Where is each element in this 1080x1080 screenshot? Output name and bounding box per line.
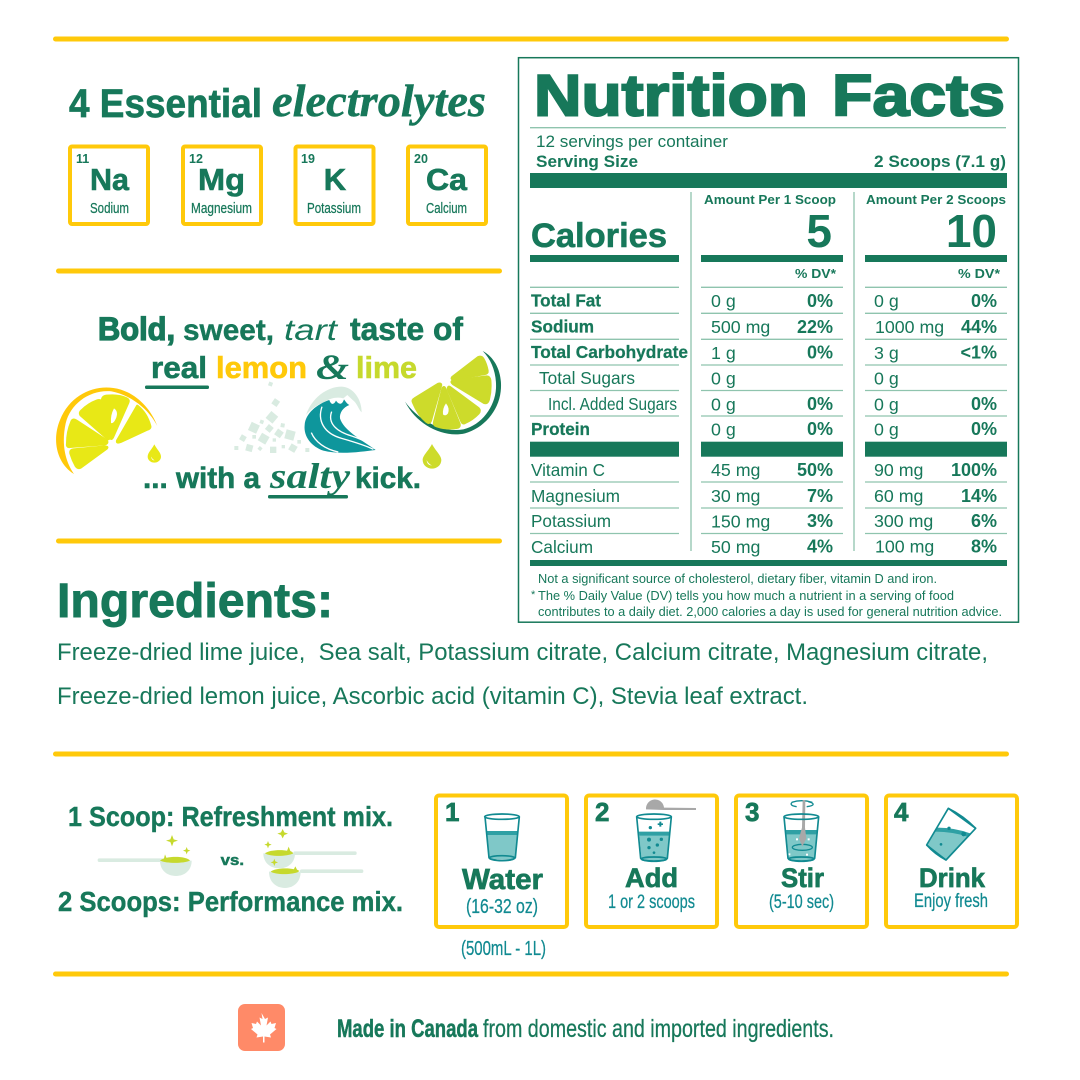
row: protein: 0 g xyxy=(711,420,736,440)
element card: calcium xyxy=(408,146,486,224)
row: vitamin c: 50% xyxy=(797,460,833,480)
element card: sodium: 11 xyxy=(76,152,89,166)
step 2: add: 1 or 2 scoops xyxy=(608,892,695,913)
taste headline line 3: kick. xyxy=(355,462,421,495)
row: potassium: 3% xyxy=(807,511,833,531)
row: added sugars: 0% xyxy=(807,394,833,414)
element card: potassium: K xyxy=(324,162,347,197)
row: total carbohydrate: <1% xyxy=(960,342,997,362)
row: magnesium: 60 mg xyxy=(874,486,923,506)
ingredients list: Freeze-dried lime juice, Sea salt, Potassium citrate, Calcium citrate, Magnesium citrate, xyxy=(57,639,988,666)
icon: scoops xyxy=(98,829,363,888)
row: calcium: 4% xyxy=(807,536,833,556)
row: sodium: 500 mg xyxy=(711,317,770,337)
ingredients list: Freeze-dried lemon juice, Ascorbic acid (vitamin C), Stevia leaf extract. xyxy=(57,683,808,710)
panel: ingredients xyxy=(57,575,988,710)
icon: lemon drop xyxy=(148,444,161,463)
row: magnesium xyxy=(531,486,997,506)
row: added sugars: 0 g xyxy=(874,394,899,414)
calories row: % DV* xyxy=(958,267,1000,281)
row: total carbohydrate: 0% xyxy=(807,342,833,362)
row: vitamin c: Vitamin C xyxy=(531,460,605,480)
icon: adding scoop to glass xyxy=(637,799,696,861)
heading: 4 essential electrolytes xyxy=(69,75,486,126)
row: magnesium: Magnesium xyxy=(531,486,620,506)
row: potassium: 150 mg xyxy=(711,512,770,532)
footnotes: * xyxy=(531,589,536,601)
row: total sugars xyxy=(539,368,899,388)
nutrition title: Nutrition xyxy=(534,64,808,128)
footer text: from domestic and imported ingredients. xyxy=(483,1015,834,1043)
calories row: Amount Per 1 Scoop xyxy=(704,193,836,207)
row: sodium: 1000 mg xyxy=(875,317,944,337)
heading: 4 essential electrolytes: electrolytes xyxy=(272,75,486,126)
element card: calcium: 20 xyxy=(414,152,428,166)
ingredients list xyxy=(57,639,988,710)
element card: magnesium: 12 xyxy=(189,152,203,166)
row: total carbohydrate: 1 g xyxy=(711,343,736,363)
step 4: drink xyxy=(886,796,1017,927)
taste headline line 3: ... with a xyxy=(143,462,260,495)
row: sodium: 22% xyxy=(797,317,833,337)
taste headline line 1: sweet, xyxy=(183,314,274,347)
row: added sugars: 0% xyxy=(971,394,997,414)
step 3: stir: Stir xyxy=(781,863,824,893)
element card: magnesium: Mg xyxy=(198,162,245,197)
row: protein: 0 g xyxy=(874,420,899,440)
row: vitamin c: 45 mg xyxy=(711,460,760,480)
footer text: Made in Canada xyxy=(337,1015,479,1043)
element card: calcium: Ca xyxy=(426,162,468,197)
taste headline line 2: lemon xyxy=(216,350,307,385)
row: potassium: 300 mg xyxy=(874,511,933,531)
icon: maple leaf xyxy=(238,1004,285,1051)
row: magnesium: 14% xyxy=(961,486,997,506)
taste headline line 1: tart xyxy=(284,314,339,347)
step 1: water: Water xyxy=(462,864,543,896)
panel: electrolytes xyxy=(69,75,486,224)
step 1: water: (16-32 oz) xyxy=(466,896,538,918)
serving info xyxy=(536,133,1006,171)
step 3: stir: 3 xyxy=(745,797,759,827)
element card: potassium xyxy=(296,146,374,224)
icon: stirring glass xyxy=(784,800,819,861)
row: magnesium: 7% xyxy=(807,486,833,506)
icon: tilted glass xyxy=(927,808,976,860)
row: total carbohydrate xyxy=(531,342,997,363)
taste headline line 1 xyxy=(98,311,463,347)
panel: scoop comparison xyxy=(58,801,403,917)
row: calcium: Calcium xyxy=(531,537,593,557)
step 4: drink: 4 xyxy=(894,797,909,827)
row: total sugars: 0 g xyxy=(711,368,736,388)
taste headline line 2: real xyxy=(151,350,207,385)
row: calcium: 8% xyxy=(971,536,997,556)
element card: potassium: Potassium xyxy=(307,200,361,217)
row: protein: Protein xyxy=(531,419,590,439)
row: magnesium: 30 mg xyxy=(711,486,760,506)
nutrition title: Facts xyxy=(832,64,1005,128)
taste headline line 3: salty xyxy=(269,456,351,496)
step 2: add xyxy=(586,796,717,927)
icon: lime drop xyxy=(423,444,441,469)
footnotes: The % Daily Value (DV) tells you how much a nutrient in a serving of food xyxy=(538,589,954,603)
two scoops label: 2 Scoops: Performance mix. xyxy=(58,886,403,917)
element card: magnesium xyxy=(183,146,261,224)
step 1: water: 1 xyxy=(445,797,459,827)
row: total sugars: 0 g xyxy=(874,368,899,388)
icon: glass of water xyxy=(485,814,519,861)
calories row xyxy=(530,193,1007,281)
taste headline line 1: taste of xyxy=(350,311,463,347)
taste headline line 2: & xyxy=(316,347,349,387)
calories row: 5 xyxy=(806,205,832,257)
footnotes xyxy=(531,572,1002,619)
two scoops icon xyxy=(263,829,363,888)
row: sodium xyxy=(531,316,997,337)
element card: calcium: Calcium xyxy=(426,200,467,217)
step 2: add: Add xyxy=(625,863,678,893)
row: total carbohydrate: 3 g xyxy=(874,343,899,363)
taste headline line 1: Bold, xyxy=(98,311,175,347)
footnotes: contributes to a daily diet. 2,000 calories a day is used for general nutrition advice. xyxy=(538,605,1002,619)
panel: nutrition facts xyxy=(518,58,1018,622)
step 1: water: (500mL - 1L) xyxy=(461,938,546,960)
taste headline line 3 xyxy=(143,456,421,498)
serving info: Serving Size xyxy=(536,153,638,171)
row: calcium: 100 mg xyxy=(875,536,934,556)
one scoop icon xyxy=(98,835,192,876)
vs label: vs. xyxy=(221,853,244,869)
nutrition title xyxy=(534,64,1005,128)
element card: magnesium: Magnesium xyxy=(191,200,252,217)
element card: sodium: Na xyxy=(90,162,130,197)
row: calcium: 50 mg xyxy=(711,537,760,557)
calories row: % DV* xyxy=(795,267,836,281)
step 4: drink: Drink xyxy=(919,863,986,893)
panel: taste xyxy=(56,311,501,498)
calories row: Calories xyxy=(531,217,667,255)
row: calcium xyxy=(531,536,997,557)
element card: potassium: 19 xyxy=(301,152,315,166)
row: potassium: Potassium xyxy=(531,511,611,531)
row: potassium xyxy=(531,511,997,532)
calories row: 10 xyxy=(946,205,997,257)
row: vitamin c: 100% xyxy=(951,460,997,480)
row: protein xyxy=(531,419,997,440)
icon: lime slice xyxy=(405,351,501,469)
footer: made in canada xyxy=(238,1004,834,1051)
serving info: 12 servings per container xyxy=(536,133,729,151)
row: vitamin c xyxy=(531,460,997,480)
one scoop label: 1 Scoop: Refreshment mix. xyxy=(68,801,393,832)
ingredients heading: Ingredients: xyxy=(57,575,333,628)
icon: lemon slice xyxy=(56,387,161,474)
step 4: drink: Enjoy fresh xyxy=(914,891,988,912)
step 1: water xyxy=(436,796,567,960)
row: added sugars: 0 g xyxy=(711,394,736,414)
calories row: Amount Per 2 Scoops xyxy=(866,193,1006,207)
row: protein: 0% xyxy=(971,419,997,439)
row: total carbohydrate: Total Carbohydrate xyxy=(531,342,688,362)
icon: wave xyxy=(305,387,376,453)
row: vitamin c: 90 mg xyxy=(874,460,923,480)
row: added sugars xyxy=(548,394,997,414)
serving info: 2 Scoops (7.1 g) xyxy=(874,153,1006,171)
step 3: stir: (5-10 sec) xyxy=(769,892,834,913)
element card: sodium xyxy=(70,146,148,224)
row: added sugars: Incl. Added Sugars xyxy=(548,394,677,414)
footer text xyxy=(337,1015,834,1043)
element card: sodium: Sodium xyxy=(90,200,129,217)
row: total sugars: Total Sugars xyxy=(539,368,635,388)
icon: salt crystals xyxy=(234,382,309,453)
row: potassium: 6% xyxy=(971,511,997,531)
row: total fat: Total Fat xyxy=(531,291,601,311)
footnotes: Not a significant source of cholesterol, dietary fiber, vitamin D and iron. xyxy=(538,572,937,586)
row: total fat: 0% xyxy=(807,291,833,311)
step 3: stir xyxy=(736,796,867,927)
row: sodium: 44% xyxy=(961,317,997,337)
row: sodium: Sodium xyxy=(531,316,594,336)
heading: 4 essential electrolytes: 4 Essential xyxy=(69,82,262,126)
step 2: add: 2 xyxy=(595,797,609,827)
row: total fat: 0 g xyxy=(874,291,899,311)
row: total fat: 0% xyxy=(971,291,997,311)
taste headline line 2: lime xyxy=(356,350,417,385)
row: protein: 0% xyxy=(807,419,833,439)
row: total fat xyxy=(531,291,997,311)
row: total fat: 0 g xyxy=(711,291,736,311)
taste headline line 2 xyxy=(145,347,417,389)
